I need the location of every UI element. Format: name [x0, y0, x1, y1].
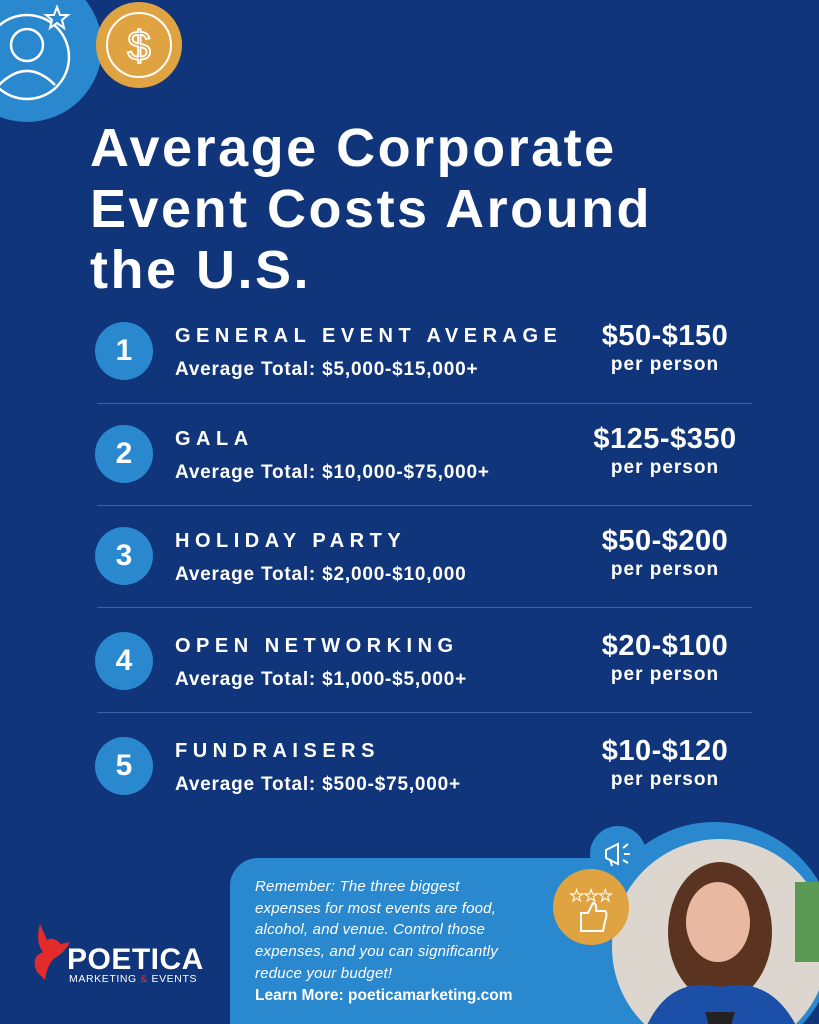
row 4: OPEN NETWORKING — [175, 635, 459, 657]
row 3: HOLIDAY PARTY — [175, 530, 406, 552]
row 4 — [95, 630, 728, 690]
row 5: FUNDRAISERS — [175, 740, 380, 762]
row 2: $125-$350 — [593, 423, 737, 455]
logo: MARKETING & EVENTS — [69, 973, 197, 985]
title — [90, 118, 652, 300]
row 5 — [95, 735, 728, 795]
row 1: per person — [611, 354, 719, 375]
photo — [612, 822, 819, 1024]
row 3: per person — [611, 559, 719, 580]
title: Average Corporate — [90, 118, 617, 178]
title: the U.S. — [90, 240, 311, 300]
row 3: Average Total: $2,000-$10,000 — [175, 564, 466, 585]
icon: dollar coin: $ — [127, 22, 151, 69]
callout text: Remember: The three biggest — [255, 878, 460, 895]
row 5: per person — [611, 769, 719, 790]
row 1: $50-$150 — [602, 320, 728, 352]
row 4: per person — [611, 664, 719, 685]
callout text — [255, 878, 513, 1004]
logo: POETICA — [67, 943, 204, 976]
row 2: 2 — [116, 437, 132, 470]
row 3 — [95, 525, 728, 585]
row 1 — [95, 320, 728, 380]
callout text: Learn More: poeticamarketing.com — [255, 987, 513, 1004]
row 1: Average Total: $5,000-$15,000+ — [175, 359, 478, 380]
row 4: $20-$100 — [602, 630, 728, 662]
row 1: 1 — [116, 334, 132, 367]
logo — [34, 924, 204, 985]
callout text: alcohol, and venue. Control those — [255, 921, 485, 938]
callout text: reduce your budget! — [255, 965, 392, 982]
row 3: $50-$200 — [602, 525, 728, 557]
row 5: Average Total: $500-$75,000+ — [175, 774, 461, 795]
row 3: 3 — [116, 539, 132, 572]
callout panel — [230, 858, 650, 1024]
icon: megaphone — [590, 826, 646, 882]
row 5: 5 — [116, 749, 132, 782]
row 2 — [95, 423, 737, 483]
row 2: Average Total: $10,000-$75,000+ — [175, 462, 490, 483]
icon: person circle — [0, 0, 100, 122]
icon: dollar coin — [96, 2, 182, 88]
icon: thumbs up stars — [553, 869, 629, 945]
callout text: expenses for most events are food, — [255, 900, 496, 917]
row 2: GALA — [175, 428, 254, 450]
icon: thumbs up stars: ★★★ — [569, 886, 613, 905]
row 1: GENERAL EVENT AVERAGE — [175, 325, 562, 347]
row 5: $10-$120 — [602, 735, 728, 767]
title: Event Costs Around — [90, 179, 652, 239]
row 4: 4 — [116, 644, 132, 677]
callout text: expenses, and you can significantly — [255, 943, 498, 960]
row 2: per person — [611, 457, 719, 478]
row 4: Average Total: $1,000-$5,000+ — [175, 669, 467, 690]
